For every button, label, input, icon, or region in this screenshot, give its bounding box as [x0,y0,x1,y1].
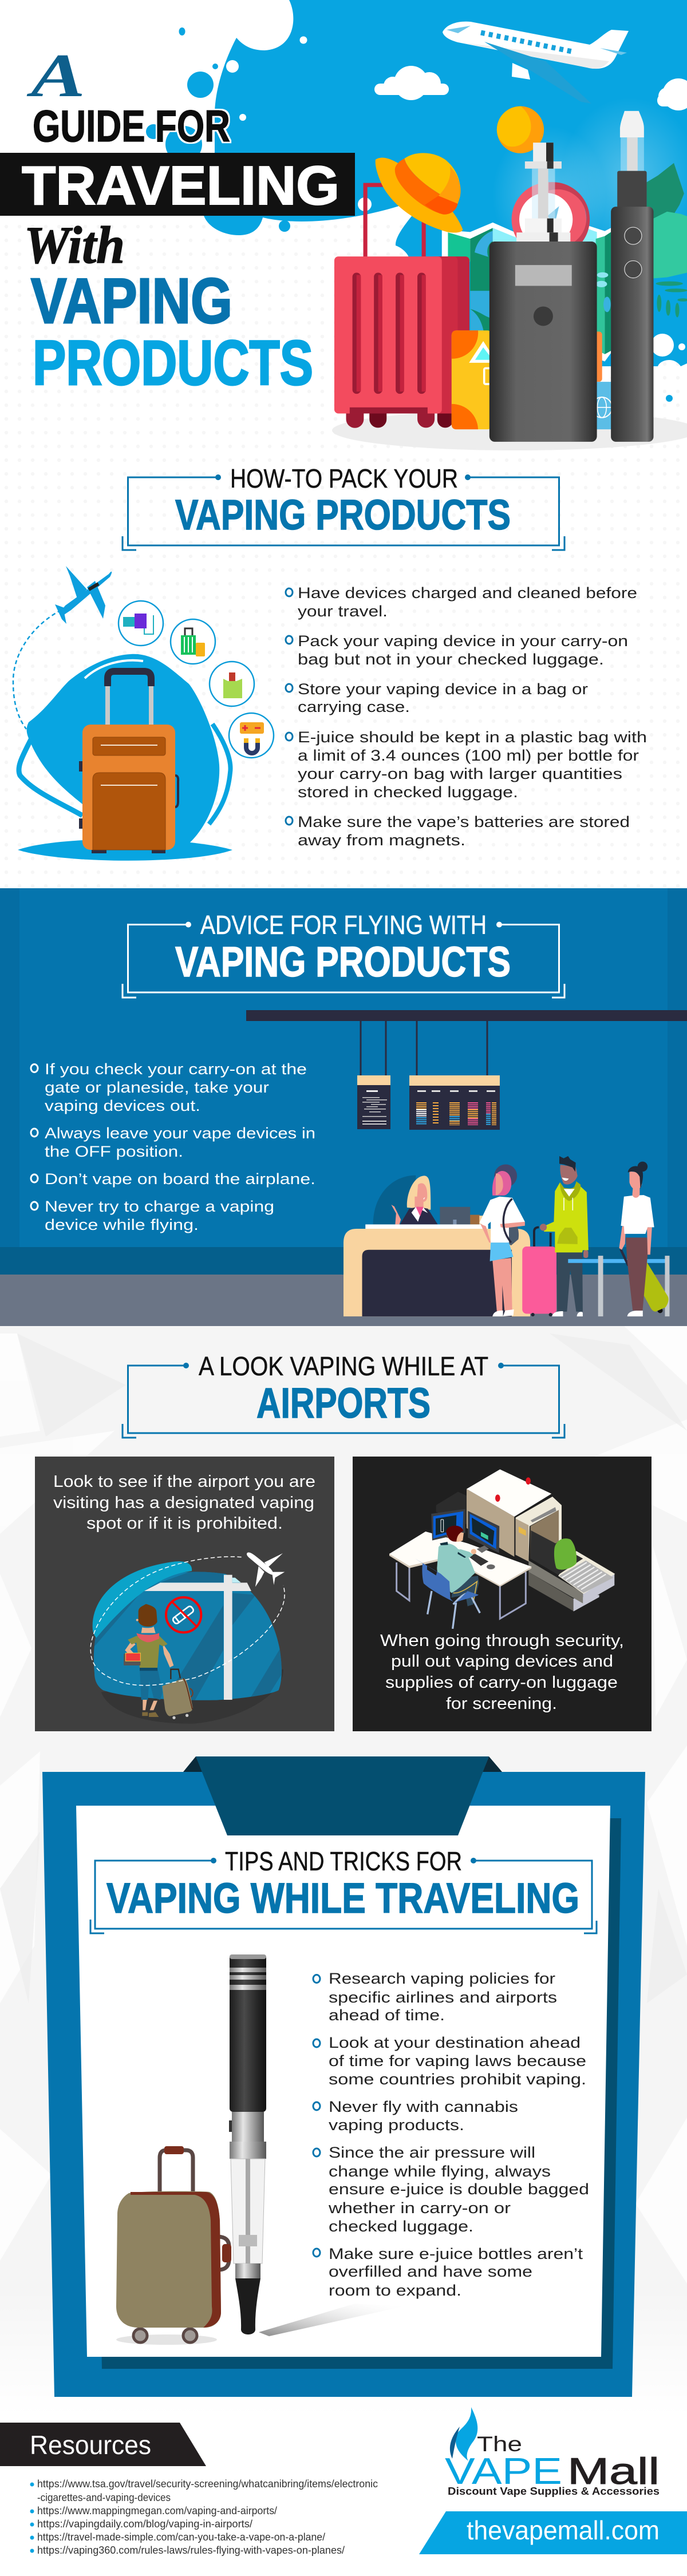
heading: tips and tricks: TIPS AND TRICKS FOR [225,1846,462,1876]
bullet item: some countries prohibit vaping. [329,2071,586,2088]
traveler with bun and bag [619,1162,669,1316]
illustration: check-in desk with travelers [344,1156,669,1316]
blue airport wall and floor [0,888,687,1326]
check-in counter [344,1224,530,1316]
heading: advice for flying with vaping products [123,910,564,998]
heading: tips and tricks [90,1846,597,1933]
light geometric background [0,1326,687,2576]
airplane [443,22,629,104]
bullet item: Always leave your vape devices in [45,1125,315,1142]
printer [436,1492,467,1524]
heading: tips and tricks: VAPING WHILE TRAVELING [106,1874,579,1922]
website banner: thevapemall.com [467,2515,660,2545]
bullet item [31,1198,274,1233]
icon: airplane [55,566,112,624]
bullet item: Research vaping policies for [329,1970,555,1987]
card text: Look to see if the airport you are [53,1473,315,1491]
resources list: https://vapingdaily.com/blog/vaping-in-airports/ [37,2518,252,2530]
card: designated vaping spot [35,1457,334,1731]
icon: trolley luggage [162,1669,193,1719]
icon: sun [497,106,544,153]
bullet item: Don’t vape on board the airplane. [45,1170,315,1188]
illustration: security scanner [389,1469,615,1629]
security officer [437,1526,495,1606]
bullet item: Look at your destination ahead [329,2034,581,2051]
heading: a look vaping while at airports: AIRPORTS [256,1379,431,1427]
heading: a look vaping while at airports: A LOOK VAPING WHILE AT [199,1351,488,1381]
icon: luggage [171,619,215,664]
bullet item: bag but not in your checked luggage. [298,651,604,668]
flight path [13,610,61,729]
hero sky background [146,0,687,402]
queue barrier [568,1256,669,1316]
logo: The Vape Mall [445,2407,660,2497]
card text: visiting has a designated vaping [53,1494,314,1512]
icon: pen vape device [611,111,653,442]
bullet list: flying advice [31,1061,315,1233]
bullet item: carrying case. [298,698,410,715]
resources list: https://travel-made-simple.com/can-you-take-a-vape-on-a-plane/ [37,2531,325,2543]
bullet item: Never fly with cannabis [329,2098,518,2115]
title: TRAVELING: TRAVELING [22,155,339,216]
bullet item: room to expand. [329,2282,461,2299]
resources list [30,2478,378,2556]
bullet item [313,2034,586,2088]
bullet item: stored in checked luggage. [298,784,518,801]
bullet item [313,1970,557,2024]
traveler [124,1604,173,1717]
heading: a look vaping while at airports [123,1351,564,1438]
title: PRODUCTS: PRODUCTS [33,328,313,398]
bullet list: packing tips [286,584,647,849]
logo: The Vape Mall: Discount Vape Supplies & Accessories [448,2486,660,2497]
icon: carry bag [210,662,254,706]
icon: box mod vape device [489,143,597,442]
card text [380,1632,624,1713]
resources heading [0,2423,206,2466]
bullet item: away from magnets. [298,832,465,849]
bullet item: specific airlines and airports [329,1989,557,2006]
hero section [0,0,687,450]
panel: advice for flying [0,888,687,1326]
bullet item [313,2144,589,2235]
bullet item [313,2245,583,2299]
icon: leaves [647,163,687,317]
bullet item [286,632,628,668]
bullet item: your travel. [298,603,388,620]
panel: how to pack [13,464,647,861]
clipboard [42,1756,645,2397]
card text: supplies of carry-on luggage [385,1673,618,1692]
resources list: https://vaping360.com/rules-laws/rules-flying-with-vapes-on-planes/ [37,2545,345,2556]
clouds [374,66,687,110]
illustration: traveler at airport window [90,1552,285,1724]
resources list: https://www.mappingmegan.com/vaping-and-airports/ [37,2505,277,2516]
bullet item: Make sure the vape’s batteries are stored [298,813,630,830]
bullet item: of time for vaping laws because [329,2052,586,2069]
bullet item: your carry-on bag with larger quantities [298,765,622,782]
desk [389,1532,531,1619]
icon: battery and magnet [229,713,274,758]
illustration: trolley suitcase [116,2146,231,2345]
traveler in green hoodie [540,1156,589,1316]
heading: advice for flying with vaping products: VAPING PRODUCTS [175,938,511,986]
bullet item: a limit of 3.4 ounces (100 ml) per bottle for [298,747,639,764]
bullet item [286,584,637,620]
heading: how-to pack your vaping products [123,464,564,550]
bullet item: device while flying. [45,1216,199,1233]
bullet item: the OFF position. [45,1143,183,1160]
title: With: With [24,216,125,274]
icon: charger [119,601,163,646]
bullet item: If you check your carry-on at the [45,1061,307,1078]
bullet item: checked luggage. [329,2218,473,2235]
bullet item [286,813,630,849]
icon: vapor flame [450,2407,477,2461]
illustration: suitcase on blue blob [13,566,274,861]
traveler with pink hair [479,1165,525,1316]
card text [53,1473,315,1533]
bullet item [286,680,588,715]
title: black banner [0,153,355,216]
panel: airports section [0,1326,687,2314]
check-in agent [373,1176,438,1224]
bullet item [31,1061,307,1114]
bullet item: Have devices charged and cleaned before [298,584,637,602]
card text: pull out vaping devices and [391,1652,613,1671]
bullet item: gate or planeside, take your [45,1079,269,1096]
website banner [419,2511,687,2554]
footer [0,2407,687,2556]
bullet item: vaping devices out. [45,1097,200,1114]
card text: for screening. [446,1695,557,1713]
logo: The Vape Mall: Mall [567,2450,660,2492]
bullet item: Make sure e-juice bottles aren’t [329,2245,583,2262]
resources list: -cigarettes-and-vaping-devices [37,2492,171,2503]
resources heading: Resources [30,2430,151,2460]
flight information boards [246,1010,687,1130]
bullet item: Store your vaping device in a bag or [298,680,588,698]
monitors [431,1509,499,1553]
flight path [90,1557,285,1685]
bullet item: ahead of time. [329,2007,445,2024]
logo: The Vape Mall: The [477,2432,522,2456]
icon: sun hat [376,153,463,233]
card text: spot or if it is prohibited. [86,1514,283,1533]
ground shadow [332,410,687,450]
desk monitor [440,1207,486,1224]
bullet item: ensure e-juice is double bagged [329,2181,589,2198]
icon: white airplane [247,1552,285,1587]
heading: how-to pack your vaping products: HOW-TO PACK YOUR [230,464,458,493]
title: A: A [26,42,85,110]
bullet item: Since the air pressure will [329,2144,535,2161]
pink suitcase [522,1227,556,1316]
icon: passport and tickets [452,330,612,429]
travel illustration: suitcase, hat, map, vape devices [334,106,687,442]
icon: map [442,223,611,362]
icon: orange suitcase [79,671,178,853]
icon: compass [512,182,590,257]
bullet item [313,2098,518,2134]
bullet item: overfilled and have some [329,2263,532,2280]
ground ellipse [18,839,232,861]
x-ray scanner [467,1469,615,1612]
blue blob [27,654,219,846]
bullet item: whether in carry-on or [328,2199,511,2217]
bullet item: Never try to charge a vaping [45,1198,274,1215]
bullet list: travel tips [313,1970,589,2299]
icon: no vaping sign [166,1597,201,1632]
title: GUIDE FOR: GUIDE FOR [33,101,230,151]
bullet item: E-juice should be kept in a plastic bag with [298,729,647,746]
bullet item [286,729,647,801]
heading: advice for flying with vaping products: ADVICE FOR FLYING WITH [200,910,487,940]
bullet item [31,1125,315,1160]
card: security screening [353,1457,652,1731]
illustration: pen vape [229,1954,404,2336]
airport window [93,1561,282,1701]
bullet item: change while flying, always [329,2163,551,2180]
bullet item: vaping products. [329,2116,464,2134]
resources list: https://www.tsa.gov/travel/security-screening/whatcanibring/items/electronic [37,2478,378,2490]
panel: tips clipboard [42,1756,645,2397]
icon: red suitcase [334,185,469,428]
office chair [415,1558,480,1629]
card text: When going through security, [380,1632,624,1650]
logo: The Vape Mall: VAPE [445,2450,562,2492]
title: VAPING: VAPING [31,266,232,337]
heading: how-to pack your vaping products: VAPING PRODUCTS [175,491,511,539]
bullet item: Pack your vaping device in your carry-on [298,632,628,650]
